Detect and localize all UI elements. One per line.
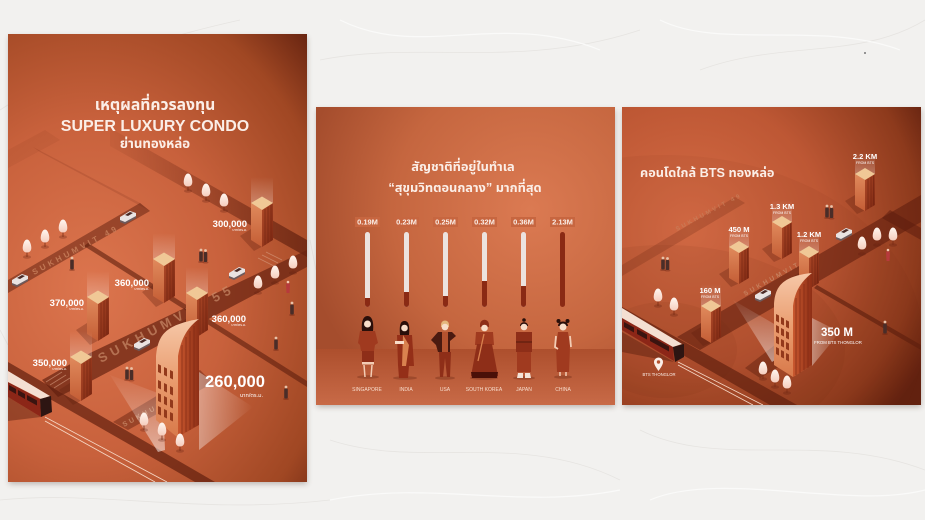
price labels [33,219,265,399]
bar: Singapore 0.19M [355,217,380,307]
bar: USA 0.25M: 0.25M [435,218,456,227]
bar: Japan 0.36M [511,217,536,307]
price labels: บาท/ตร.ม. [69,307,84,311]
figure: China [554,319,572,379]
distance rings [622,245,845,405]
road network [8,128,307,482]
bar: India 0.23M [396,220,416,307]
price labels: 300,000 [213,219,247,230]
distance labels: FROM BTS [701,295,720,299]
panel: close to BTS [622,107,921,405]
cars [12,211,245,351]
trees [23,174,297,453]
country labels [352,387,571,391]
distance labels: FROM BTS [730,234,749,238]
figure: India [393,321,417,380]
panel 1 backdrop [8,34,307,482]
road name: Sukhumvit 49: SUKHUMVIT 49 [31,223,121,277]
price labels: บาท/ตร.ม. [240,393,263,399]
distance labels: 2.2 KM [853,152,877,161]
bar: USA 0.25M [433,217,458,307]
floor [316,349,615,405]
price labels: 260,000 [205,372,265,391]
bar: Japan 0.36M: 0.36M [513,218,534,227]
road name: Sukhumvit 49: SUKHUMVIT 49 [675,193,743,233]
building: 370,000 [76,271,109,345]
price labels: 350,000 [33,358,67,369]
station pin [643,358,675,377]
title: เหตุผลที่ควรลงทุน [95,93,215,114]
distance labels: 1.3 KM [770,202,794,211]
road name: Sukhumvit 55: SUKHUMVIT 55 [95,281,237,366]
light beams [110,372,253,452]
country labels: SOUTH KOREA [466,387,503,393]
title [61,93,249,151]
road network [622,195,921,405]
bar chart [355,217,575,307]
road name: Sukhumvit 55: SUKHUMVIT 55 [743,252,817,298]
price labels: 360,000 [115,278,149,289]
heading: สัญชาติที่อยู่ในทำเล [411,157,515,175]
people [69,249,295,400]
title: ย่านทองหล่อ [120,135,190,151]
country labels: CHINA [555,387,571,393]
cars [755,228,852,302]
figure: USA [431,320,456,380]
figure: Singapore [357,316,379,379]
train [622,308,684,362]
heading: คอนโดใกล้ BTS ทองหล่อ [640,166,774,180]
price labels: บาท/ตร.ม. [232,228,247,232]
bar: South Korea 0.32M [472,217,497,307]
building: 450 m [719,225,749,287]
distance labels: FROM BTS THONGLOR [814,340,862,345]
figure: South Korea [470,320,498,380]
building: 160 m [691,284,721,346]
building: 1.3 km [762,200,792,262]
panel 2 backdrop [316,107,615,349]
bar: China 2.13M [550,217,575,307]
panel 3 backdrop [622,107,921,405]
price labels: บาท/ตร.ม. [231,323,246,327]
bar: South Korea 0.32M: 0.32M [474,218,495,227]
distance labels: FROM BTS [800,239,819,243]
country labels: SINGAPORE [352,387,383,393]
train [8,371,52,421]
distance labels: 450 M [728,225,750,234]
distance labels: 1.2 KM [797,230,821,239]
distance labels: 160 M [699,286,721,295]
distance labels [699,152,877,345]
people [660,205,890,335]
bar: Singapore 0.19M: 0.19M [357,218,378,227]
distance labels: FROM BTS [773,211,792,215]
bar: India 0.23M: 0.23M [396,218,417,227]
building: 360,000 east [178,272,208,336]
panel: nationalities [316,107,615,405]
building: 350,000 [59,331,92,405]
country labels: JAPAN [516,387,532,393]
title: SUPER LUXURY CONDO [61,118,249,135]
price labels: บาท/ตร.ม. [52,367,67,371]
price labels: 360,000 [212,314,246,325]
heading [388,157,542,195]
road name: lower Sukhumvit: SUKHUMVIT 55 [122,384,198,429]
country labels: USA [440,387,451,393]
building: 360,000 north [142,233,175,307]
heading: “สุขุมวิทตอนกลาง” มากที่สุด [388,178,542,195]
station pin: BTS THONGLOR [643,372,675,377]
distance labels: FROM BTS [856,161,875,165]
building: 300,000 [240,177,273,251]
figure: Japan [513,318,535,380]
distance labels: 350 M [821,327,853,339]
featured tower [156,319,199,437]
building: 2.2 km [845,152,875,214]
panel: reasons to invest [8,34,307,482]
building: 1.2 km [789,230,819,292]
trees [654,228,897,395]
bar: China 2.13M: 2.13M [552,218,573,227]
featured tower [774,273,812,377]
country labels: INDIA [399,387,413,393]
price labels: บาท/ตร.ม. [134,287,149,291]
price labels: 370,000 [50,298,84,309]
light beams [733,300,840,366]
